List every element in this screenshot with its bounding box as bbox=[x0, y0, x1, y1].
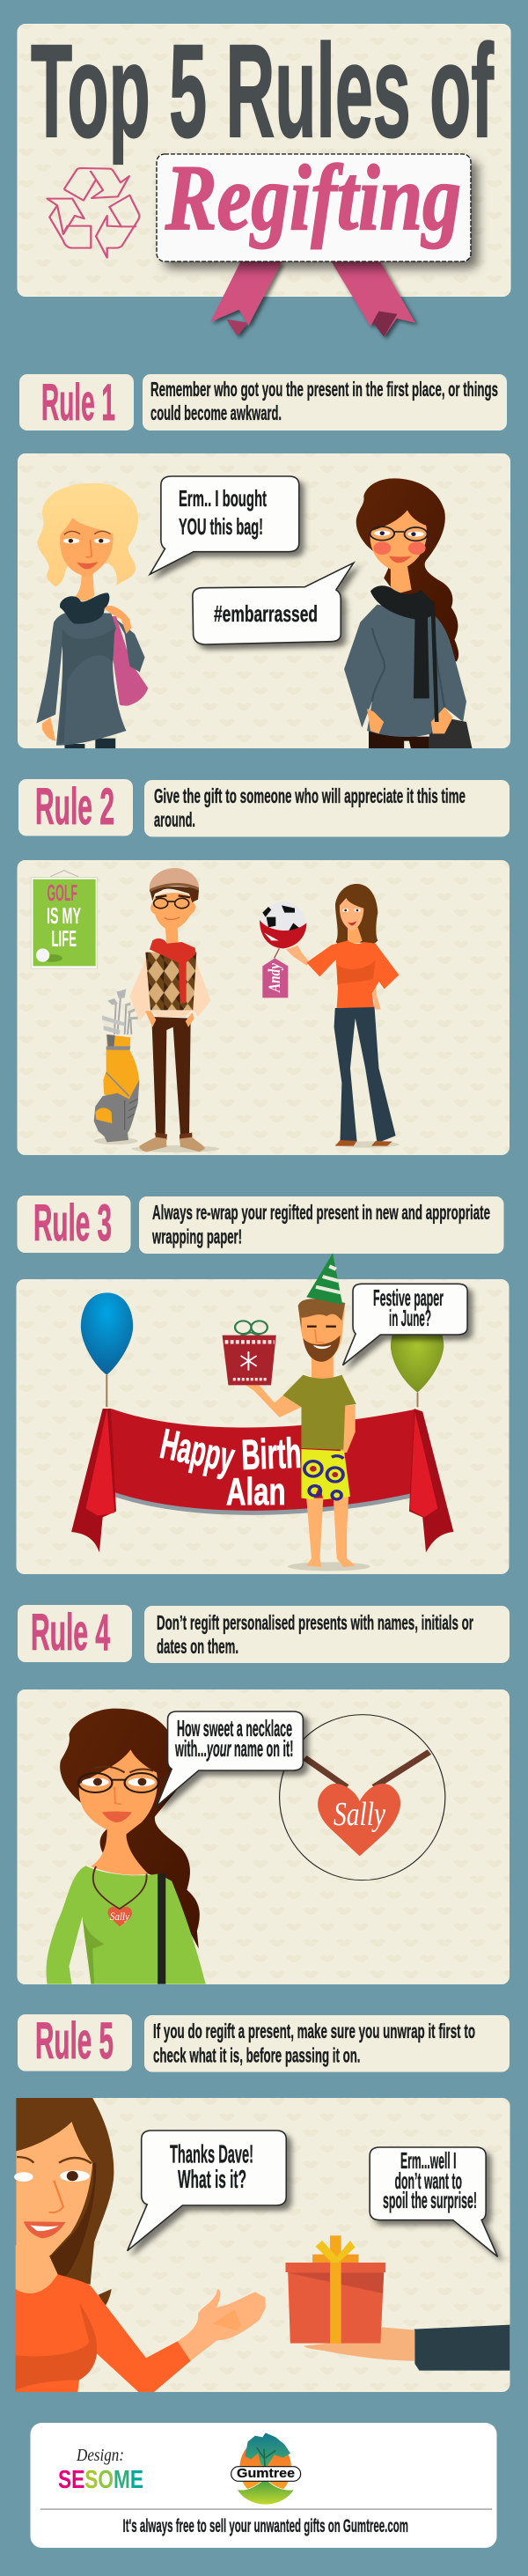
speech bubble: necklace: with...your name on it! bbox=[175, 1735, 294, 1762]
icon: recycling symbol bbox=[48, 168, 139, 258]
rule 2 heading: Rule 2 bbox=[35, 778, 114, 835]
character: smiling woman reaching out bbox=[14, 2098, 266, 2392]
rule 2 text: around. bbox=[154, 808, 195, 831]
label: regifting plate: Regifting bbox=[165, 146, 461, 249]
rule 3 text: wrapping paper! bbox=[151, 1225, 242, 1248]
speech bubble: spoil the surprise bbox=[370, 2147, 498, 2256]
magnified necklace circle: Sally bbox=[334, 1796, 385, 1833]
footer panel bbox=[30, 2423, 496, 2548]
panel: header bbox=[18, 17, 510, 337]
magnified necklace circle bbox=[280, 1715, 445, 1880]
character: blonde woman with bag bbox=[36, 483, 148, 748]
rule 3 heading bbox=[18, 1195, 130, 1253]
speech bubble: festive paper: in June? bbox=[389, 1305, 431, 1331]
rule 5 heading bbox=[18, 2013, 132, 2071]
speech bubble: spoil the surprise: Erm...well I bbox=[400, 2147, 456, 2174]
rule 3 text bbox=[139, 1196, 503, 1254]
speech bubble: necklace bbox=[157, 1711, 303, 1807]
rule 1 text: could become awkward. bbox=[150, 401, 282, 424]
logo: design sesome bbox=[58, 2446, 143, 2494]
speech bubble: embarrassed bbox=[193, 563, 354, 644]
rule 1 text bbox=[143, 374, 507, 431]
speech bubble: bought this bag: Erm.. I bought bbox=[179, 485, 267, 512]
balloons bbox=[81, 1292, 444, 1407]
gift: wrapped football with tag: Andy bbox=[266, 963, 284, 993]
rule 5 heading: Rule 5 bbox=[35, 2013, 114, 2070]
birthday banner bbox=[71, 1409, 453, 1552]
panel: rule 2 scene bbox=[18, 860, 510, 1155]
birthday banner: Alan bbox=[226, 1470, 285, 1513]
speech bubble: embarrassed: #embarrassed bbox=[214, 600, 318, 627]
rule 4 heading bbox=[18, 1604, 132, 1662]
panel: rule 1 scene bbox=[18, 453, 510, 748]
speech bubble: necklace: How sweet a necklace bbox=[177, 1715, 292, 1741]
birthday banner: Birth bbox=[241, 1431, 302, 1479]
speech bubble: thanks dave: What is it? bbox=[178, 2166, 246, 2194]
panel: rule 4 scene bbox=[18, 1689, 510, 1984]
ribbon left bbox=[210, 261, 282, 336]
gift box and giving hand bbox=[285, 2235, 510, 2371]
rule 4 text: dates on them. bbox=[157, 1635, 238, 1658]
speech bubble: bought this bag: YOU this bag! bbox=[179, 513, 263, 540]
gift in festive paper bbox=[223, 1321, 276, 1385]
logo: design sesome: Design: bbox=[76, 2446, 124, 2465]
speech bubble: festive paper: Festive paper bbox=[373, 1284, 444, 1311]
panel: rule 5 scene bbox=[14, 2098, 510, 2392]
speech bubble: thanks dave bbox=[128, 2131, 286, 2251]
speech bubble: thanks dave: Thanks Dave! bbox=[170, 2141, 253, 2169]
logo: gumtree: Gumtree bbox=[237, 2466, 295, 2481]
poster: golf is my life: IS MY bbox=[47, 902, 81, 929]
character: woman with necklace bbox=[47, 1709, 206, 1984]
character: bearded man with party hat bbox=[246, 1253, 370, 1571]
rule 5 text bbox=[144, 2015, 510, 2072]
birthday banner: Happy bbox=[157, 1421, 238, 1482]
speech bubble: bought this bag bbox=[150, 476, 299, 574]
logo: design sesome: SESOME bbox=[58, 2466, 143, 2494]
rule 4 text bbox=[144, 1606, 510, 1663]
panel: rule 3 scene bbox=[16, 1253, 509, 1574]
poster: golf is my life: GOLF bbox=[48, 880, 77, 906]
character: woman holding ball bbox=[286, 884, 400, 1148]
rule 1 heading bbox=[19, 374, 134, 431]
rule 2 heading bbox=[18, 778, 133, 836]
golf bag with clubs bbox=[94, 989, 139, 1144]
character: brunette woman blushing bbox=[344, 478, 472, 748]
rule 5 text: check what it is, before passing it on. bbox=[153, 2044, 361, 2067]
ribbon right bbox=[332, 262, 415, 337]
rule 4 heading: Rule 4 bbox=[31, 1604, 110, 1661]
character: woman with necklace: Sally bbox=[110, 1910, 129, 1923]
speech bubble: festive paper bbox=[343, 1284, 467, 1365]
logo: gumtree bbox=[231, 2432, 301, 2505]
poster: golf is my life bbox=[31, 871, 97, 968]
rule 2 text bbox=[144, 780, 510, 836]
rule 1 heading: Rule 1 bbox=[41, 374, 115, 431]
footer divider bbox=[40, 2509, 492, 2510]
gift: wrapped football with tag bbox=[260, 902, 306, 997]
rule 3 heading: Rule 3 bbox=[33, 1195, 112, 1252]
character: man in argyle vest bbox=[129, 868, 219, 1152]
poster: golf is my life: LIFE bbox=[51, 925, 77, 952]
